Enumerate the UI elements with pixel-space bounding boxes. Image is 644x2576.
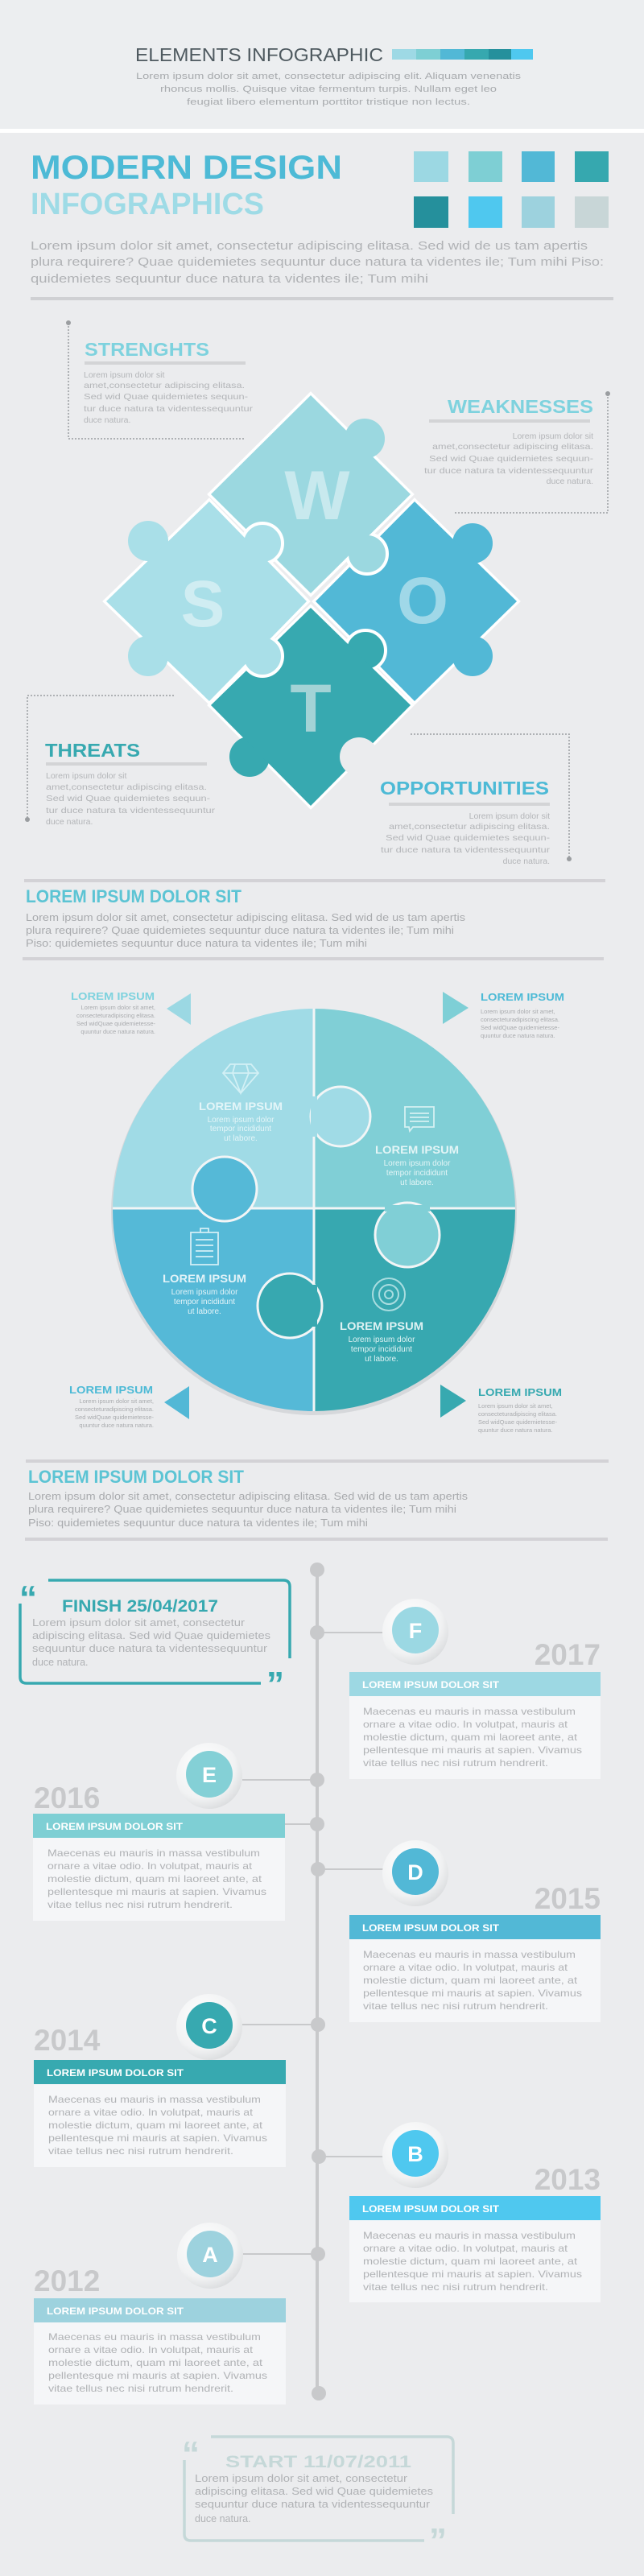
side label: bottom left: quuntur duce natura natura. <box>79 1422 154 1429</box>
text: quadrant 4: LOREM IPSUM <box>340 1319 423 1332</box>
callout: weaknesses: Sed wid Quae quidemietes sequun- <box>429 454 594 464</box>
text: quadrant 1: ut labore. <box>224 1134 258 1143</box>
milestone D 2015: D <box>407 1860 423 1885</box>
text: quadrant 2: tempor incididunt <box>386 1169 448 1178</box>
text: quadrant 2: ut labore. <box>400 1179 434 1187</box>
side label: top right: Sed widQuae quidemietesse- <box>481 1024 559 1031</box>
side label: top left: Lorem ipsum dolor sit amet, <box>80 1004 155 1011</box>
milestone E 2016: ornare a vitae odio. In volutpat, mauris at <box>47 1860 253 1872</box>
callout: threats: amet,consectetur adipiscing elitasa. <box>46 782 207 792</box>
milestone F 2017 <box>349 1599 601 1779</box>
milestone B 2013: Maecenas eu mauris in massa vestibulum <box>363 2230 576 2241</box>
milestone F 2017: molestie dictum, quam mi laoreet ante, at <box>363 1732 578 1743</box>
callout: strengths: STRENGHTS <box>85 339 209 360</box>
arrow: left bottom <box>164 1386 189 1419</box>
callout: opportunities: Sed wid Quae quidemietes sequun- <box>386 833 551 843</box>
milestone D 2015: pellentesque mi mauris at sapien. Vivamus <box>363 1988 582 1999</box>
intro paragraph <box>31 239 604 286</box>
side label: top left: LOREM IPSUM <box>71 991 155 1002</box>
title: modern design infographics <box>31 148 342 221</box>
text: quadrant 2 <box>375 1143 459 1187</box>
section heading 3: Piso: quidemietes sequuntur duce natura ta videntes ile; Tum mihi <box>28 1517 368 1529</box>
title: modern design infographics: INFOGRAPHICS <box>31 188 264 221</box>
text: quadrant 2: LOREM IPSUM <box>375 1143 459 1156</box>
milestone E 2016: Maecenas eu mauris in massa vestibulum <box>47 1847 260 1859</box>
milestone D 2015: Maecenas eu mauris in massa vestibulum <box>363 1949 576 1960</box>
milestone D 2015: 2015 <box>535 1882 601 1915</box>
milestone E 2016: molestie dictum, quam mi laoreet ante, at <box>47 1873 262 1885</box>
arrow: right <box>443 992 469 1024</box>
callout: opportunities: amet,consectetur adipiscing elitasa. <box>389 822 550 832</box>
callout: start: “ <box>182 2434 200 2474</box>
callout: strengths: duce natura. <box>84 415 130 425</box>
text: quadrant 4: tempor incididunt <box>351 1345 412 1354</box>
milestone A 2012: ornare a vitae odio. In volutpat, mauris at <box>48 2344 254 2355</box>
side label: top right: Lorem ipsum dolor sit amet, <box>481 1008 555 1015</box>
milestone F 2017: pellentesque mi mauris at sapien. Vivamus <box>363 1744 582 1756</box>
milestone C 2014: LOREM IPSUM DOLOR SIT <box>47 2067 184 2079</box>
header: elements infographic: Lorem ipsum dolor sit amet, consectetur adipiscing elit. Aliquam venenatis <box>136 72 522 81</box>
section heading 3: plura requirere? Quae quidemietes sequuntur duce natura ta videntes ile; Tum mihi <box>28 1504 456 1515</box>
section heading 2: plura requirere? Quae quidemietes sequuntur duce natura ta videntes ile; Tum mihi <box>26 925 454 936</box>
text: quadrant 4: Lorem ipsum dolor <box>349 1335 415 1344</box>
callout: finish: ” <box>266 1665 284 1704</box>
milestone B 2013: molestie dictum, quam mi laoreet ante, at <box>363 2256 578 2267</box>
letters: T <box>290 671 332 746</box>
milestone F 2017: vitae tellus nec nisi rutrum hendrerit. <box>363 1757 548 1769</box>
intro paragraph: quidemietes sequuntur duce natura ta videntes ile; Tum mihi <box>31 272 428 286</box>
milestone F 2017: ornare a vitae odio. In volutpat, mauris at <box>363 1719 568 1730</box>
side label: top left: Sed widQuae quidemietesse- <box>76 1020 155 1027</box>
text: quadrant 3: ut labore. <box>188 1307 221 1316</box>
milestone C 2014: molestie dictum, quam mi laoreet ante, at <box>48 2120 263 2131</box>
callout: threats: Sed wid Quae quidemietes sequun- <box>46 794 211 803</box>
header: elements infographic: ELEMENTS INFOGRAPHIC <box>135 44 383 65</box>
milestone C 2014: Maecenas eu mauris in massa vestibulum <box>48 2094 261 2105</box>
side label: bottom left: LOREM IPSUM <box>69 1385 153 1396</box>
milestone C 2014: pellentesque mi mauris at sapien. Vivamus <box>48 2132 267 2144</box>
icon: diamond <box>223 1064 258 1093</box>
side label: top right: quuntur duce natura natura. <box>481 1032 555 1039</box>
milestone E 2016: E <box>202 1763 217 1787</box>
side label: bottom left: Lorem ipsum dolor sit amet, <box>79 1397 154 1405</box>
callout: finish: adipiscing elitasa. Sed wid Quae quidemietes <box>32 1630 270 1641</box>
side label: top left: quuntur duce natura natura. <box>80 1028 155 1035</box>
milestone F 2017: Maecenas eu mauris in massa vestibulum <box>363 1706 576 1717</box>
milestone E 2016: vitae tellus nec nisi rutrum hendrerit. <box>47 1899 233 1910</box>
text: quadrant 3: LOREM IPSUM <box>163 1272 246 1285</box>
callout: start: adipiscing elitasa. Sed wid Quae quidemietes <box>195 2486 433 2497</box>
callout: finish: “ <box>19 1579 37 1618</box>
side label: bottom right: quuntur duce natura natura. <box>478 1426 553 1434</box>
callout: finish: duce natura. <box>32 1657 89 1668</box>
milestone D 2015: vitae tellus nec nisi rutrum hendrerit. <box>363 2000 548 2012</box>
side label: bottom right <box>440 1385 562 1434</box>
section heading 2 <box>23 879 605 960</box>
arrow: right bottom <box>440 1385 466 1418</box>
milestone E 2016: LOREM IPSUM DOLOR SIT <box>46 1821 184 1832</box>
callout: start: sequuntur duce natura ta videntessequuntur <box>195 2499 430 2510</box>
text: quadrant 1: tempor incididunt <box>210 1125 271 1133</box>
icon: chat <box>405 1107 434 1131</box>
text: quadrant 2: Lorem ipsum dolor <box>384 1159 451 1168</box>
milestone C 2014 <box>34 1994 286 2167</box>
callout: strengths: tur duce natura ta videntessequuntur <box>84 404 254 414</box>
side label: top left: consecteturadipiscing elitasa. <box>76 1012 155 1019</box>
milestone D 2015: molestie dictum, quam mi laoreet ante, at <box>363 1975 578 1986</box>
side label: bottom left <box>69 1385 189 1429</box>
callout: threats: tur duce natura ta videntessequuntur <box>46 806 216 815</box>
milestone A 2012: pellentesque mi mauris at sapien. Vivamus <box>48 2370 267 2381</box>
side label: top right: LOREM IPSUM <box>481 992 564 1003</box>
callout: opportunities: Lorem ipsum dolor sit <box>469 811 550 821</box>
text: quadrant 3 <box>163 1272 246 1316</box>
text: quadrant 3: Lorem ipsum dolor <box>171 1288 238 1297</box>
milestone B 2013 <box>349 2122 601 2302</box>
callout: strengths: Sed wid Quae quidemietes sequun- <box>84 392 249 402</box>
title: modern design infographics: MODERN DESIGN <box>31 148 342 186</box>
callout: threats: duce natura. <box>46 817 93 827</box>
milestone E 2016: pellentesque mi mauris at sapien. Vivamus <box>47 1886 266 1897</box>
side label: bottom right: LOREM IPSUM <box>478 1387 562 1398</box>
icon: clipboard <box>191 1228 218 1265</box>
side label: bottom right: Lorem ipsum dolor sit amet, <box>478 1402 553 1410</box>
milestone A 2012: molestie dictum, quam mi laoreet ante, at <box>48 2357 263 2368</box>
panel: SWOT <box>25 320 610 866</box>
icon: gear <box>373 1278 405 1311</box>
milestone A 2012: 2012 <box>34 2264 100 2297</box>
milestone D 2015: LOREM IPSUM DOLOR SIT <box>362 1922 500 1934</box>
callout: opportunities: tur duce natura ta videntessequuntur <box>381 845 551 855</box>
milestone F 2017: LOREM IPSUM DOLOR SIT <box>362 1679 500 1690</box>
callout: opportunities: OPPORTUNITIES <box>380 778 549 799</box>
callout: finish: Lorem ipsum dolor sit amet, consectetur <box>32 1617 245 1629</box>
header: elements infographic <box>135 44 533 107</box>
header: elements infographic: rhoncus mollis. Quisque vitae fermentum turpis. Nullam eget leo <box>160 85 497 94</box>
milestone A 2012: vitae tellus nec nisi rutrum hendrerit. <box>48 2383 233 2394</box>
milestone B 2013: vitae tellus nec nisi rutrum hendrerit. <box>363 2281 548 2293</box>
section heading 2: Piso: quidemietes sequuntur duce natura ta videntes ile; Tum mihi <box>26 938 367 949</box>
side label: top left <box>71 991 191 1035</box>
callout: start <box>182 2434 453 2561</box>
header: elements infographic: feugiat libero elementum porttitor tristique non lectus. <box>187 97 470 107</box>
milestone E 2016: 2016 <box>34 1781 100 1814</box>
milestone A 2012: Maecenas eu mauris in massa vestibulum <box>48 2331 261 2343</box>
chart: puzzle circle <box>109 1006 519 1417</box>
letters: S <box>181 568 225 641</box>
milestone B 2013: ornare a vitae odio. In volutpat, mauris at <box>363 2243 568 2254</box>
text: quadrant 1: Lorem ipsum dolor <box>208 1116 275 1125</box>
callout: threats: Lorem ipsum dolor sit <box>46 771 126 781</box>
milestone A 2012: A <box>202 2243 218 2267</box>
callout: weaknesses: Lorem ipsum dolor sit <box>513 431 593 441</box>
side label: bottom left: Sed widQuae quidemietesse- <box>75 1414 154 1421</box>
text: quadrant 3: tempor incididunt <box>174 1298 235 1307</box>
milestone F 2017: 2017 <box>535 1638 601 1671</box>
section heading 3: Lorem ipsum dolor sit amet, consectetur adipiscing elitasa. Sed wid de us tam apertis <box>28 1491 468 1502</box>
callout: opportunities: duce natura. <box>503 857 550 866</box>
callout: strengths: amet,consectetur adipiscing elitasa. <box>84 381 245 390</box>
callout: opportunities <box>380 734 572 866</box>
arrow: left <box>167 993 191 1025</box>
puzzle diamond <box>105 394 518 807</box>
milestone D 2015: ornare a vitae odio. In volutpat, mauris at <box>363 1962 568 1973</box>
milestone A 2012 <box>34 2223 286 2405</box>
section heading 2: Lorem ipsum dolor sit amet, consectetur adipiscing elitasa. Sed wid de us tam apertis <box>26 912 465 923</box>
milestone D 2015 <box>349 1840 601 2022</box>
letters <box>181 457 448 746</box>
text: quadrant 1 <box>199 1100 283 1143</box>
callout: weaknesses: WEAKNESSES <box>448 396 593 417</box>
milestone C 2014: 2014 <box>34 2024 101 2057</box>
timeline axis <box>242 1563 383 2401</box>
callout: finish <box>19 1579 290 1704</box>
side label: bottom right: Sed widQuae quidemietesse- <box>478 1418 557 1426</box>
side label: bottom left: consecteturadipiscing elitasa. <box>75 1406 154 1413</box>
milestone B 2013: pellentesque mi mauris at sapien. Vivamus <box>363 2268 582 2280</box>
callout: start: START 11/07/2011 <box>225 2453 411 2471</box>
callout: weaknesses: tur duce natura ta videntessequuntur <box>424 466 594 476</box>
milestone F 2017: F <box>409 1619 422 1643</box>
callout: weaknesses: duce natura. <box>547 477 593 486</box>
letters: O <box>397 564 448 638</box>
milestone A 2012: LOREM IPSUM DOLOR SIT <box>47 2306 184 2317</box>
milestone C 2014: ornare a vitae odio. In volutpat, mauris at <box>48 2107 254 2118</box>
milestone B 2013: 2013 <box>535 2163 601 2196</box>
section heading 2: LOREM IPSUM DOLOR SIT <box>26 886 242 906</box>
callout: strengths <box>66 320 254 439</box>
callout: strengths: Lorem ipsum dolor sit <box>84 370 164 380</box>
intro paragraph: Lorem ipsum dolor sit amet, consectetur adipiscing elitasa. Sed wid de us tam apertis <box>31 239 588 253</box>
milestone E 2016 <box>33 1743 285 1921</box>
callout: start: ” <box>429 2521 447 2561</box>
section heading 3 <box>25 1459 609 1541</box>
letters: W <box>284 457 350 535</box>
callout: weaknesses: amet,consectetur adipiscing elitasa. <box>432 442 593 452</box>
color swatches <box>414 151 609 228</box>
callout: finish: sequuntur duce natura ta videntessequuntur <box>32 1643 267 1654</box>
section heading 3: LOREM IPSUM DOLOR SIT <box>28 1467 245 1487</box>
callout: start: Lorem ipsum dolor sit amet, consectetur <box>195 2473 407 2484</box>
text: quadrant 4 <box>340 1319 423 1364</box>
side label: top right <box>443 992 564 1039</box>
text: quadrant 4: ut labore. <box>365 1355 398 1364</box>
callout: threats: THREATS <box>45 740 140 761</box>
callout: start: duce natura. <box>195 2513 251 2524</box>
callout: finish: FINISH 25/04/2017 <box>62 1597 218 1616</box>
callout: weaknesses <box>424 391 610 513</box>
milestone B 2013: LOREM IPSUM DOLOR SIT <box>362 2203 500 2215</box>
milestone B 2013: B <box>407 2142 423 2166</box>
side label: bottom right: consecteturadipiscing elitasa. <box>478 1410 557 1418</box>
color bar <box>392 49 533 60</box>
milestone C 2014: C <box>201 2014 217 2038</box>
side label: top right: consecteturadipiscing elitasa. <box>481 1016 559 1023</box>
milestone C 2014: vitae tellus nec nisi rutrum hendrerit. <box>48 2145 233 2157</box>
callout: threats <box>25 696 216 827</box>
intro paragraph: plura requirere? Quae quidemietes sequuntur duce natura ta videntes ile; Tum mihi Piso: <box>31 255 604 269</box>
text: quadrant 1: LOREM IPSUM <box>199 1100 283 1113</box>
